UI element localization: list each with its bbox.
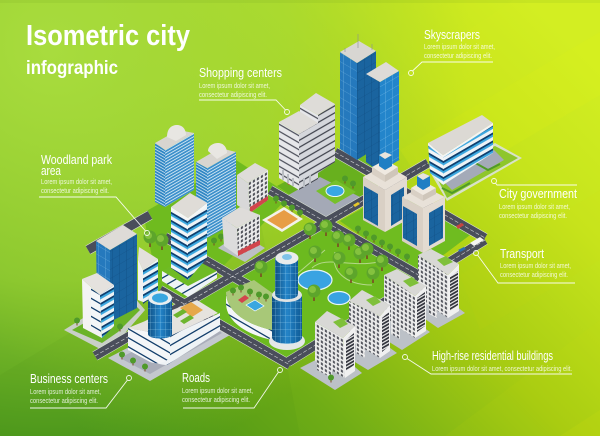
title: [26, 20, 190, 79]
label: shopping centers: [199, 65, 290, 114]
trees woodland edge: [74, 230, 168, 332]
label: shopping centers: consectetur adipiscing elit.: [199, 90, 267, 99]
residential building four: [405, 249, 465, 328]
government towers: [363, 152, 445, 253]
residential building three: [370, 269, 430, 350]
business center: [119, 291, 220, 372]
park: [254, 220, 388, 304]
label: business centers: Business centers: [30, 371, 108, 386]
business tower cluster: [82, 225, 158, 338]
shopping center: [279, 93, 335, 190]
label: woodland park area: Woodland park: [41, 152, 112, 167]
roads: [88, 152, 485, 365]
hedge trees: [211, 176, 410, 262]
label: city government: consectetur adipiscing elit.: [499, 211, 567, 220]
label: skyscrapers: Lorem ipsum dolor sit amet,: [424, 42, 495, 51]
label: business centers: consectetur adipiscing elit.: [30, 396, 98, 405]
label: transport: [474, 246, 575, 283]
label: transport: Lorem ipsum dolor sit amet,: [500, 261, 571, 270]
curved pool building: [226, 280, 282, 340]
label: high-rise residential buildings: [402, 348, 572, 374]
label: business centers: Lorem ipsum dolor sit amet,: [30, 387, 101, 396]
label: skyscrapers: [408, 27, 495, 76]
striped tower one: [155, 125, 194, 207]
fountain: [326, 186, 344, 196]
label: shopping centers: Shopping centers: [199, 65, 282, 80]
label: transport: consectetur adipiscing elit.: [500, 270, 568, 279]
city ground blocks: [64, 135, 522, 381]
label: roads: [182, 368, 282, 408]
city government building: [428, 115, 493, 185]
label: woodland park area: Lorem ipsum dolor sit amet,: [41, 177, 112, 186]
label: transport: Transport: [500, 246, 544, 261]
label: woodland park area: area: [41, 163, 62, 178]
label: woodland park area: [39, 152, 150, 236]
label: skyscrapers: Skyscrapers: [424, 27, 480, 42]
label: city government: Lorem ipsum dolor sit amet,: [499, 202, 570, 211]
label: skyscrapers: consectetur adipiscing elit.: [424, 51, 492, 60]
label: city government: City government: [499, 186, 577, 201]
sports court: [262, 207, 303, 232]
office building with windows: [237, 163, 268, 213]
label: shopping centers: Lorem ipsum dolor sit amet,: [199, 81, 270, 90]
label: woodland park area: consectetur adipiscing elit.: [41, 186, 109, 195]
cylindrical tower: [269, 252, 305, 350]
label: roads: consectetur adipiscing elit.: [182, 395, 250, 404]
striped tower two: [196, 143, 236, 238]
title: Isometric city: [26, 20, 190, 52]
label: city government: [492, 178, 577, 220]
label: roads: Lorem ipsum dolor sit amet,: [182, 386, 253, 395]
residential building one: [300, 311, 362, 390]
label: roads: Roads: [182, 370, 210, 385]
vehicles: [287, 180, 484, 252]
label: business centers: [30, 371, 132, 408]
skyscrapers: [340, 34, 399, 172]
title: infographic: [26, 58, 118, 79]
striped tower front: [162, 193, 217, 297]
residential building two: [335, 290, 397, 370]
central office building: [218, 207, 265, 262]
label: high-rise residential buildings: High-rise residential buildings: [432, 348, 553, 363]
